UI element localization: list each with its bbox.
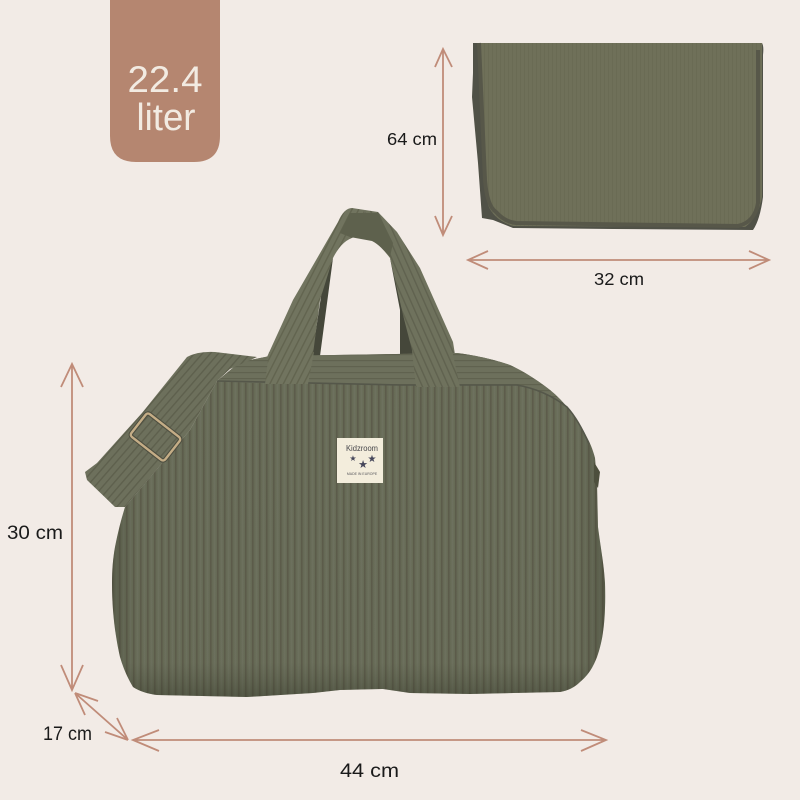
arrow: mat width: [468, 251, 769, 269]
handle: [265, 208, 460, 386]
changing mat photo: [472, 43, 763, 230]
label stars: ★: [368, 454, 377, 465]
label stars: ★: [349, 454, 357, 463]
label: bag height: 30 cm: [7, 523, 63, 544]
label: bag depth: 17 cm: [43, 724, 92, 745]
top flap: [217, 353, 589, 444]
bag photo: [85, 208, 605, 697]
label: [337, 438, 383, 483]
label: mat width: 32 cm: [594, 269, 644, 289]
label small text: MADE IN EUROPE: [347, 472, 378, 476]
capacity unit: liter: [136, 97, 196, 139]
mat binding: [479, 43, 758, 226]
capacity value: 22.4: [128, 59, 202, 100]
side tab: [594, 462, 600, 488]
label stars: ★: [358, 459, 368, 471]
flap seam: [217, 381, 589, 444]
mat fabric: [478, 43, 762, 227]
handle inner face: [340, 213, 393, 257]
arrow: mat height: [435, 49, 452, 235]
label stars: [349, 454, 377, 471]
body shading: [112, 353, 605, 697]
arrow: bag depth: [75, 693, 128, 740]
buckle: [130, 412, 181, 462]
label: bag width: 44 cm: [340, 761, 399, 782]
brand name: Kidzroom: [346, 444, 378, 453]
handle feet: [265, 352, 314, 384]
capacity badge: [110, 0, 220, 162]
label: mat height: 64 cm: [387, 129, 437, 149]
arrow: bag width: [133, 730, 606, 751]
arrow: bag height: [61, 364, 83, 690]
bag body: [112, 353, 605, 697]
shoulder strap: [85, 352, 257, 507]
handle back: [312, 258, 415, 356]
